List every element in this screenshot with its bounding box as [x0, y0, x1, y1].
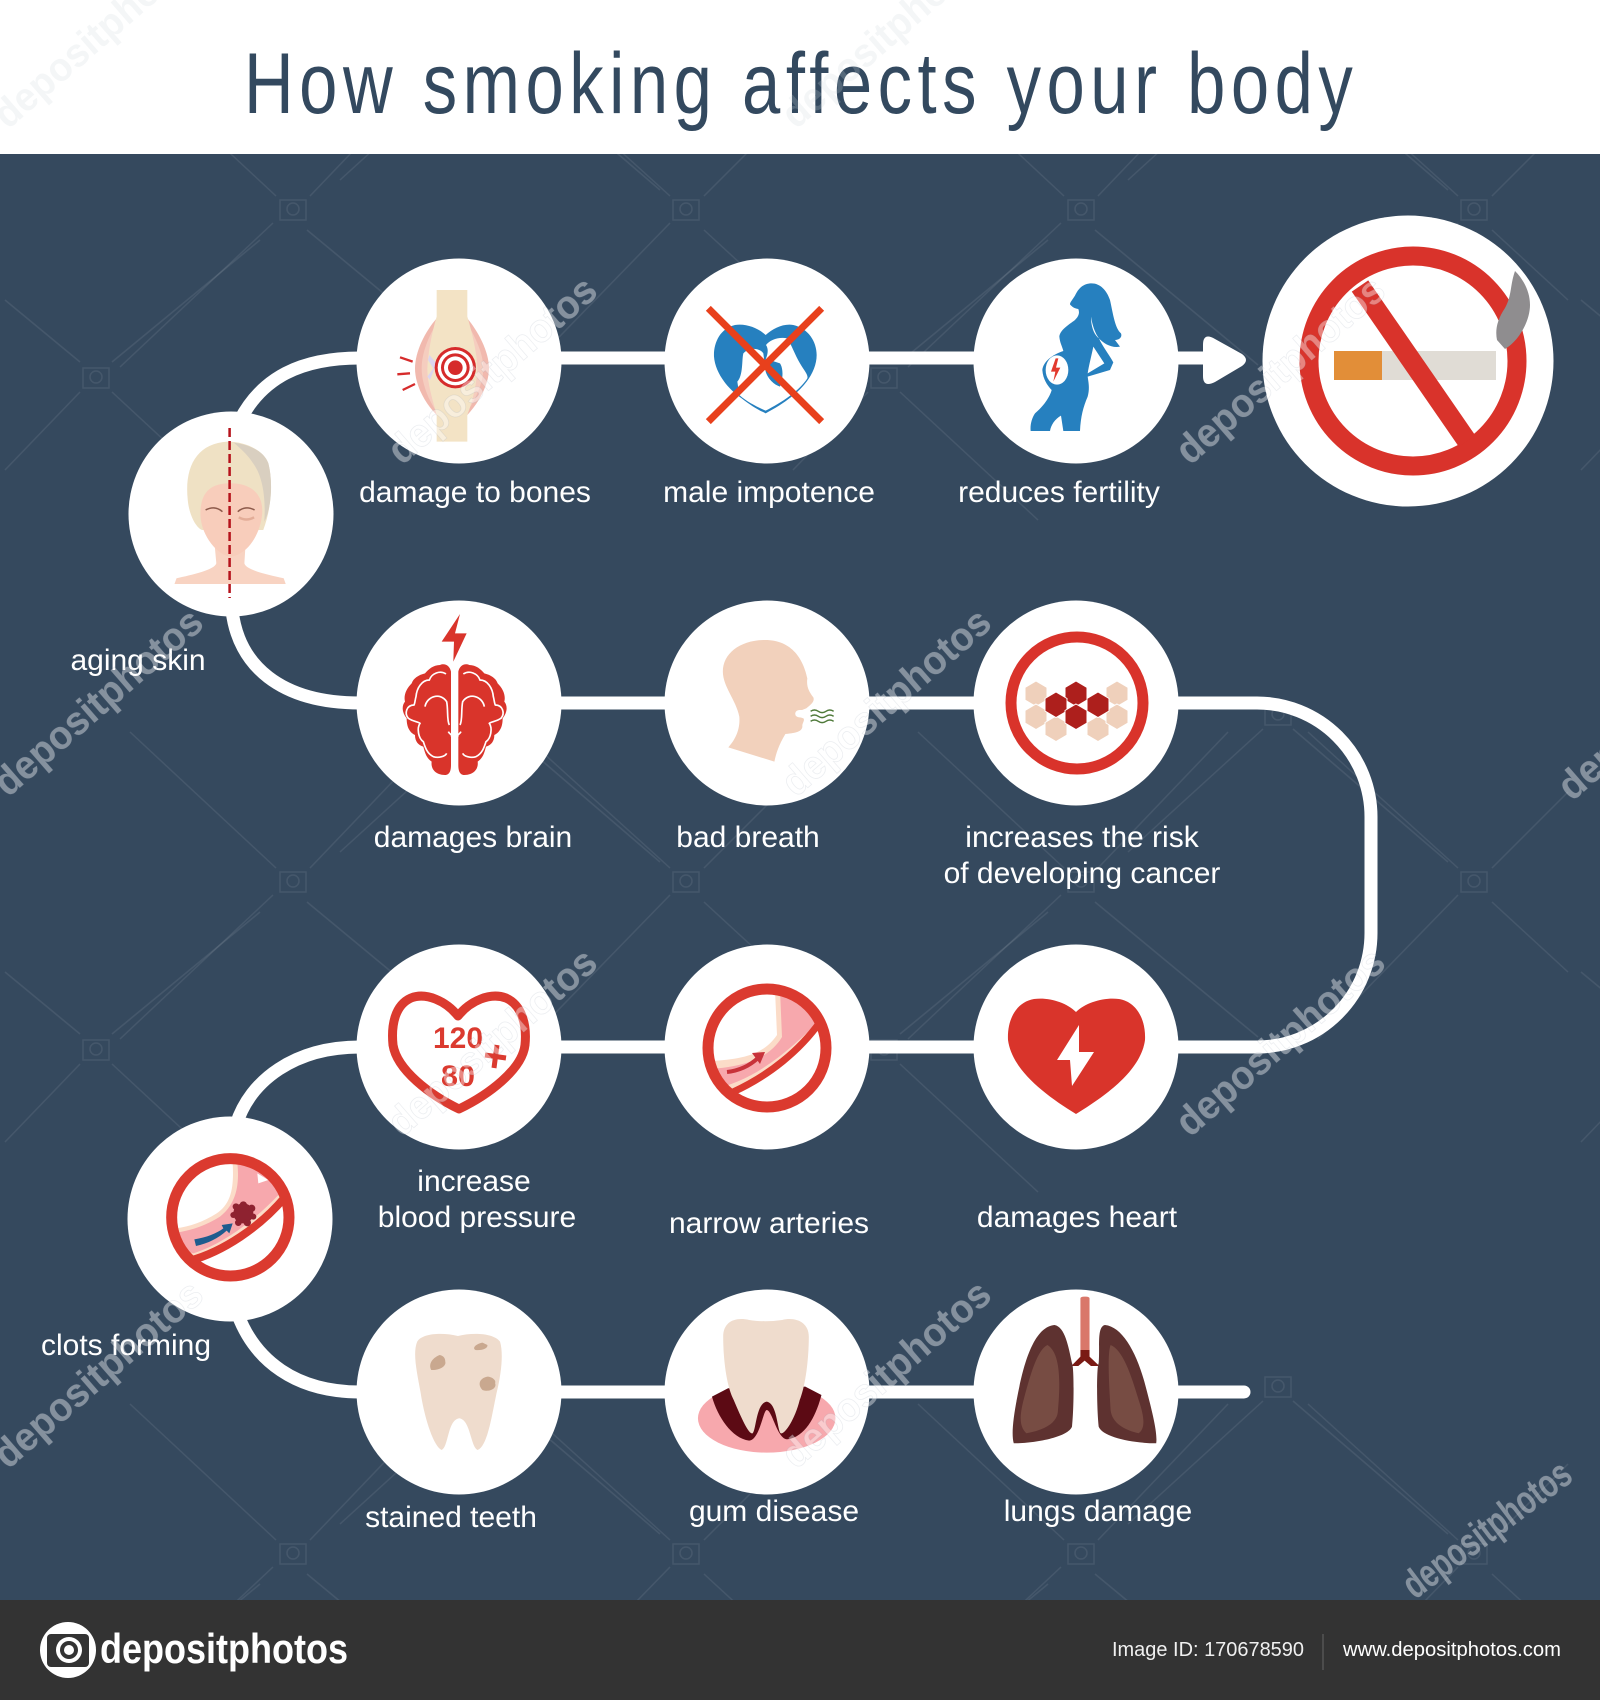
node: stained teeth: [356, 1290, 562, 1494]
watermarks: depositphotos: [379, 268, 606, 473]
label: increase blood pressure: [378, 1165, 576, 1234]
watermarks: depositphotos: [379, 940, 606, 1145]
node: narrow arteries: [664, 944, 870, 1150]
node: aging skin: [128, 412, 334, 616]
watermarks: depositphotos: [1167, 940, 1394, 1145]
icon: tooth in gum: [698, 1319, 835, 1453]
icon: smoke: [1496, 271, 1530, 349]
node: lungs damage: [974, 1290, 1178, 1494]
node: damages brain: [356, 600, 562, 806]
icon: heart with bolt: [1008, 999, 1145, 1114]
icon: narrowed artery: [695, 985, 835, 1107]
watermarks: depositphotos: [773, 1272, 1000, 1477]
icon: heart with reading: 80: [441, 1060, 475, 1093]
watermarks: depositphotos: [773, 600, 1000, 805]
icon: artery with clot: [172, 1159, 289, 1276]
icon: cigarette: [1334, 351, 1496, 380]
label: stained teeth: stained teeth: [365, 1501, 537, 1534]
node: cancer risk: [974, 600, 1178, 806]
node: clots forming: [128, 1116, 332, 1322]
label: reduces fertility: reduces fertility: [958, 476, 1160, 509]
icon: prohibition ring: [1309, 256, 1517, 466]
website: www.depositphotos.com: [1342, 1639, 1561, 1661]
node: reduces fertility: [974, 258, 1178, 464]
icon: face: [174, 428, 286, 598]
label: increases the risk of developing cancer: of developing cancer: [944, 857, 1220, 890]
icon: lungs: [1013, 1297, 1156, 1443]
icon: heart crossed out: [708, 308, 822, 422]
node: no smoking sign: [1262, 216, 1554, 506]
node: gum disease: [664, 1290, 870, 1494]
label: lungs damage: lungs damage: [1004, 1495, 1192, 1528]
icon: bone joint: [397, 290, 489, 442]
label: clots forming: clots forming: [41, 1329, 211, 1362]
icon: heart with reading: [393, 996, 525, 1109]
icon: heart with reading: 120: [433, 1022, 483, 1055]
label: damage to bones: damage to bones: [359, 476, 591, 509]
icon: pregnant silhouette: [1031, 283, 1121, 431]
label: gum disease: gum disease: [689, 1495, 859, 1528]
label: male impotence: male impotence: [663, 476, 875, 509]
node: bad breath: [664, 600, 870, 806]
labels: [41, 476, 1220, 1534]
node: male impotence: [664, 258, 870, 464]
title: How smoking affects your body: [244, 36, 1353, 132]
label: damages heart: damages heart: [977, 1201, 1178, 1234]
watermarks: depositphotos: [1167, 268, 1394, 473]
label: narrow arteries: narrow arteries: [669, 1207, 869, 1240]
node: damages heart: [974, 944, 1178, 1150]
label: damages brain: damages brain: [374, 821, 572, 854]
image id: Image ID: 170678590: [1112, 1639, 1304, 1661]
connector path: [232, 358, 1371, 1392]
label: increase blood pressure: blood pressure: [378, 1201, 576, 1234]
label: increases the risk of developing cancer: [944, 821, 1220, 890]
logo wordmark: depositphotos: [100, 1625, 348, 1672]
icon: ring with cells: [1011, 637, 1143, 769]
arrow head: [1203, 337, 1246, 384]
logo mark: [40, 1622, 96, 1678]
footer bar: [0, 1600, 1600, 1700]
icon: head profile: [723, 640, 834, 762]
node: damage to bones: [356, 258, 562, 464]
label: aging skin: aging skin: [70, 644, 206, 677]
icon: stained tooth: [415, 1334, 502, 1450]
icon: brain: [403, 614, 507, 775]
label: bad breath: bad breath: [676, 821, 820, 854]
label: increases the risk of developing cancer: increases the risk: [965, 821, 1200, 854]
node: blood pressure: [356, 944, 562, 1150]
label: increase blood pressure: increase: [417, 1165, 531, 1198]
